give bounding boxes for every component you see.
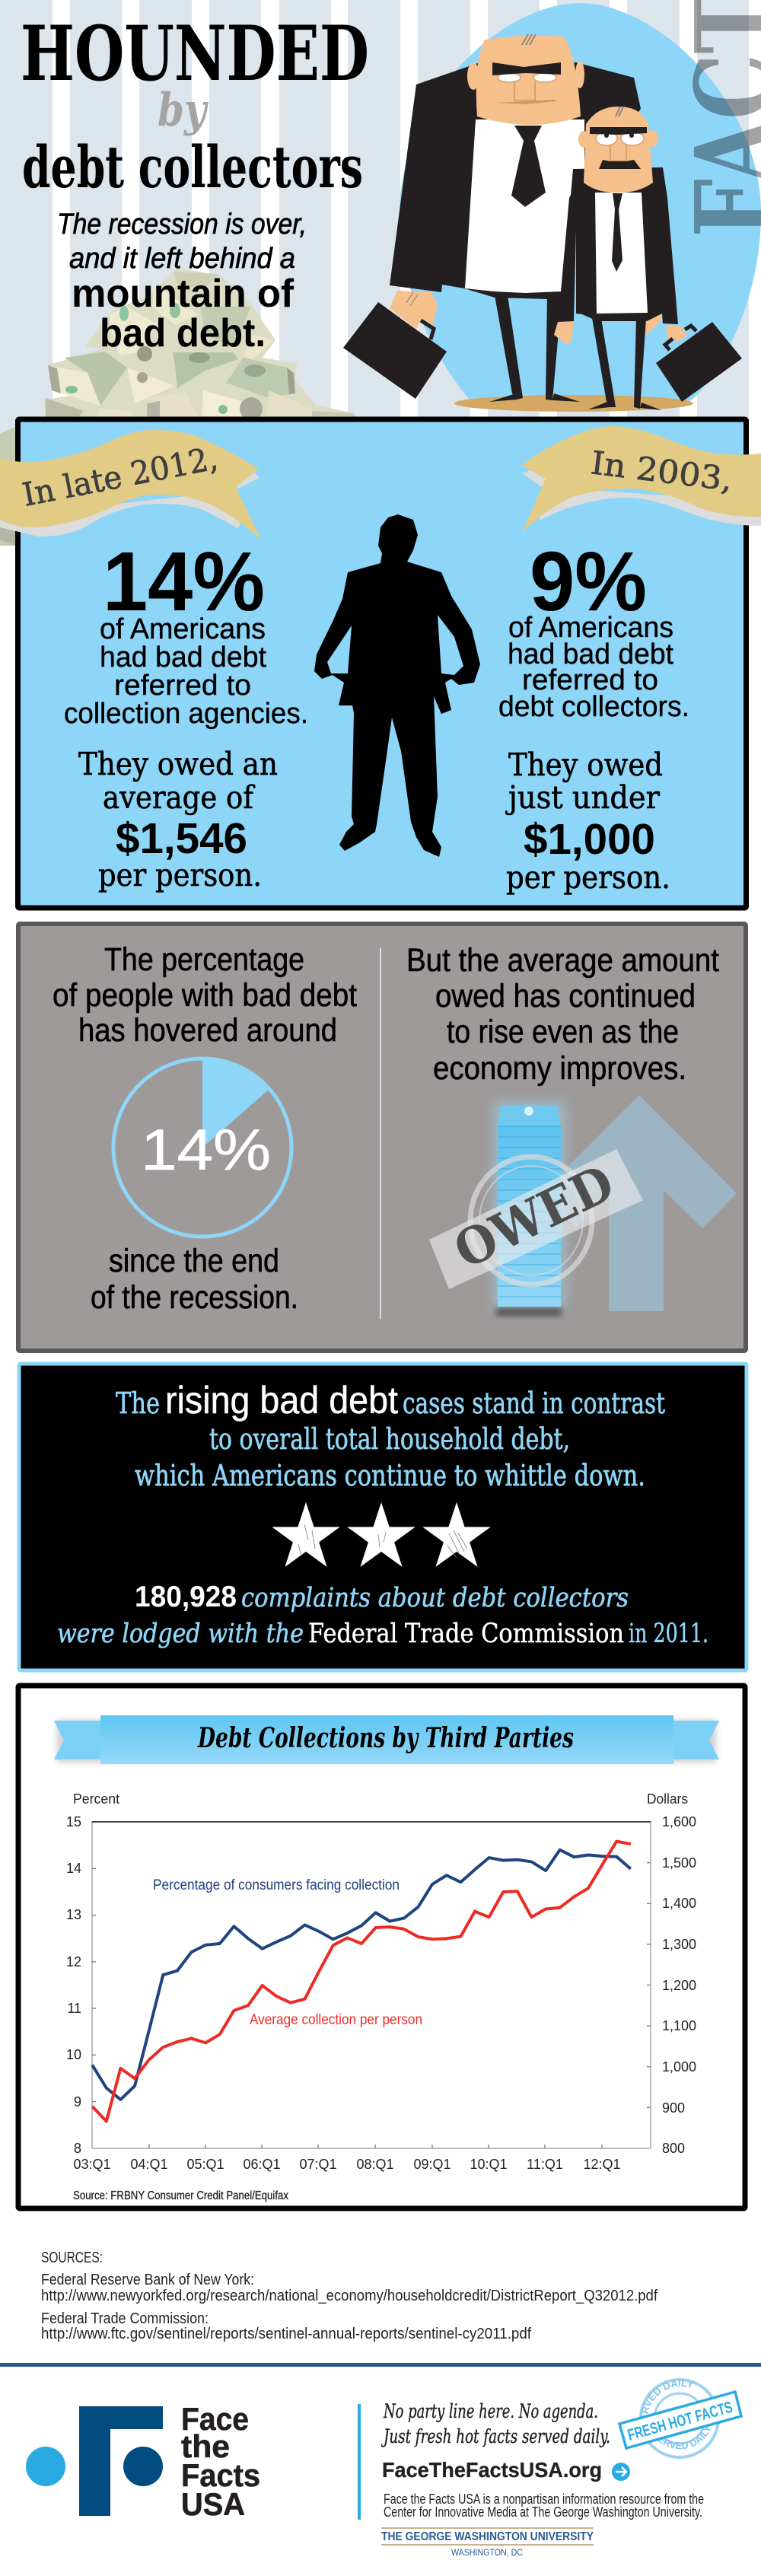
right text: owed has continued: [435, 978, 696, 1014]
panel: contrast and complaints: [19, 1364, 747, 1670]
description: [384, 2492, 704, 2520]
axis labels: Dollars: [647, 1791, 688, 1807]
stamp: fresh hot facts: SERVED DAILY: [658, 2427, 711, 2449]
stack of money: [493, 1102, 565, 1316]
logo wordmark: Facts: [181, 2457, 260, 2493]
pie chart: 14%: [113, 1059, 291, 1237]
logo mark: [26, 2406, 163, 2516]
ribbon: In late 2012: In late 2012,: [20, 439, 221, 514]
left text top: of people with bad debt: [53, 977, 357, 1014]
OWED stamp: OWED: [445, 1153, 623, 1280]
three stars: [272, 1502, 491, 1567]
axis labels: 9: [74, 2094, 81, 2110]
contrast text: The: [116, 1387, 160, 1420]
icon: arrow circle: [612, 2463, 630, 2481]
intro text: and it left behind a: [69, 243, 295, 275]
left text bottom: of the recession.: [91, 1279, 298, 1316]
series: percentage of consumers: [92, 1850, 631, 2100]
small man: [554, 107, 742, 410]
stat: 9% in 2003: debt collectors.: [498, 691, 689, 723]
logo wordmark: USA: [181, 2486, 245, 2522]
header panel: [0, 0, 761, 546]
axis labels: 10: [66, 2047, 81, 2062]
intro text: bad debt.: [100, 311, 266, 355]
logo wordmark: [181, 2401, 260, 2522]
stat: 14% in late 2012: 14%: [103, 535, 265, 629]
axis labels: 12: [66, 1954, 81, 1969]
right text: But the average amount: [406, 942, 719, 979]
axis labels: 13: [66, 1907, 81, 1922]
ground shadow: [454, 395, 693, 412]
stat: 9% in 2003: 9%: [530, 535, 647, 629]
axis labels: 12:Q1: [583, 2157, 621, 2172]
stat: 14% in late 2012: per person.: [98, 857, 262, 893]
tagline: No party line here. No agenda.: [383, 2400, 598, 2422]
sources: Federal Trade Commission:: [41, 2310, 209, 2327]
complaints text: [57, 1581, 708, 1649]
axis labels: [66, 1791, 696, 2172]
website: FaceTheFactsUSA.org: [382, 2458, 602, 2482]
axis labels: 04:Q1: [130, 2157, 168, 2172]
striped background: [0, 0, 761, 457]
axis labels: 05:Q1: [186, 2157, 224, 2172]
axis labels: 11:Q1: [527, 2157, 563, 2172]
axis labels: 15: [66, 1814, 81, 1829]
panel: chart: [18, 1686, 745, 2208]
stamp: fresh hot facts: SERVED DAILY: [641, 2380, 694, 2417]
left text bottom: [91, 1243, 298, 1316]
complaints text: Federal Trade Commission: [308, 1619, 624, 1649]
right text: [406, 942, 719, 1087]
axis labels: 1,000: [662, 2059, 696, 2074]
big man: [343, 34, 641, 402]
stat: 14% in late 2012: of Americans: [100, 613, 266, 645]
axis labels: 8: [74, 2141, 81, 2156]
stat: 9% in 2003: per person.: [506, 859, 670, 896]
stat: 14% in late 2012: collection agencies.: [64, 698, 308, 730]
chart banner heading: [54, 1715, 719, 1764]
title: HOUNDED: HOUNDED: [21, 10, 369, 98]
sources: http://www.ftc.gov/sentinel/reports/sentinel-annual-reports/sentinel-cy2011.pdf: [41, 2326, 531, 2342]
stat: 9% in 2003: [498, 535, 689, 896]
stat: 9% in 2003: They owed: [508, 747, 663, 783]
axis labels: 08:Q1: [356, 2157, 394, 2172]
series label: average: Average collection per person: [250, 2012, 422, 2028]
intro text: mountain of: [72, 272, 295, 316]
stat: 14% in late 2012: average of: [103, 779, 256, 816]
stat: 9% in 2003: of Americans: [508, 612, 673, 644]
stat: 9% in 2003: referred to: [522, 664, 658, 696]
ribbon: In late 2012: [0, 430, 261, 540]
axis labels: 07:Q1: [299, 2157, 337, 2172]
complaints text: were lodged with the: [57, 1619, 304, 1649]
sources: http://www.newyorkfed.org/research/national_economy/householdcredit/DistrictReport_Q32012.pdf: [41, 2288, 658, 2304]
axis labels: 14: [66, 1861, 81, 1876]
series label: percentage: Percentage of consumers facing collection: [153, 1877, 400, 1893]
axis labels: 1,200: [662, 1978, 696, 1993]
line chart: [66, 1791, 696, 2202]
complaints text: 180,928: [135, 1581, 237, 1613]
contrast text: rising bad debt: [165, 1379, 398, 1422]
stat: 14% in late 2012: had bad debt: [100, 642, 266, 673]
axis labels: Percent: [73, 1791, 119, 1807]
sources: SOURCES:: [41, 2250, 103, 2266]
stat: 9% in 2003: had bad debt: [508, 638, 673, 670]
complaints text: complaints about debt collectors: [241, 1583, 629, 1613]
contrast text: to overall total household debt,: [209, 1422, 570, 1456]
axis labels: 1,400: [662, 1896, 696, 1911]
title: debt collectors: debt collectors: [22, 133, 363, 201]
up arrow: [541, 1095, 737, 1311]
stat: 14% in late 2012: [64, 535, 308, 893]
stat: 9% in 2003: just under: [505, 779, 660, 816]
chart banner heading: Debt Collections by Third Parties: [197, 1722, 574, 1754]
footer: [26, 2378, 743, 2558]
money pile: [0, 268, 358, 546]
left text top: The percentage: [104, 941, 304, 978]
sources: Federal Reserve Bank of New York:: [41, 2272, 254, 2288]
axis labels: 1,100: [662, 2018, 696, 2033]
axis labels: 1,300: [662, 1937, 696, 1952]
panel: 2012 vs 2003: [0, 419, 761, 908]
pie chart: 14%: 14%: [141, 1118, 271, 1183]
ribbon: In 2003: In 2003,: [589, 444, 734, 498]
contrast text: which Americans continue to whittle down.: [135, 1459, 645, 1492]
chart source: Source: FRBNY Consumer Credit Panel/Equifax: [73, 2189, 288, 2202]
stamp: fresh hot facts: [618, 2378, 743, 2459]
axis labels: 09:Q1: [413, 2157, 451, 2172]
logo wordmark: Face: [181, 2401, 249, 2437]
university logo: [381, 2527, 594, 2558]
silhouette of man with empty pockets: [314, 514, 480, 857]
illustration: two debt collectors: [343, 34, 742, 412]
ribbon: In 2003: [522, 426, 761, 533]
logo wordmark: the: [181, 2428, 230, 2464]
intro text: The recession is over,: [57, 209, 307, 240]
left text bottom: since the end: [109, 1243, 279, 1279]
stat: 14% in late 2012: $1,546: [116, 814, 247, 863]
axis labels: 1,600: [662, 1814, 696, 1829]
blue oval behind figures: [400, 3, 761, 407]
sources: [41, 2250, 658, 2342]
axis labels: 800: [662, 2141, 685, 2156]
axis labels: 03:Q1: [73, 2157, 111, 2172]
contrast text: cases stand in contrast: [403, 1387, 665, 1420]
right text: to rise even as the: [447, 1014, 679, 1050]
contrast text: [116, 1379, 665, 1492]
series: average collection: [92, 1842, 631, 2122]
left text top: has hovered around: [78, 1012, 337, 1049]
axis labels: 900: [662, 2100, 685, 2116]
right text: economy improves.: [433, 1050, 686, 1087]
complaints text: in 2011.: [629, 1619, 708, 1649]
axis labels: 10:Q1: [470, 2157, 508, 2172]
axis labels: 11: [67, 2001, 81, 2016]
university logo: WASHINGTON, DC: [451, 2547, 523, 2558]
intro text: [57, 209, 307, 355]
axis labels: 1,500: [662, 1855, 696, 1871]
left text top: [53, 941, 357, 1049]
panel: percentage and amount owed: [18, 924, 746, 1351]
stat: 14% in late 2012: referred to: [114, 670, 251, 702]
tagline: Just fresh hot facts served daily.: [380, 2425, 610, 2447]
university logo: THE GEORGE WASHINGTON UNIVERSITY: [381, 2530, 594, 2543]
stat: 14% in late 2012: They owed an: [78, 746, 278, 782]
tagline: [380, 2400, 610, 2447]
title: by: by: [158, 84, 209, 137]
stat: 9% in 2003: $1,000: [524, 815, 655, 864]
axis labels: 06:Q1: [243, 2157, 281, 2172]
